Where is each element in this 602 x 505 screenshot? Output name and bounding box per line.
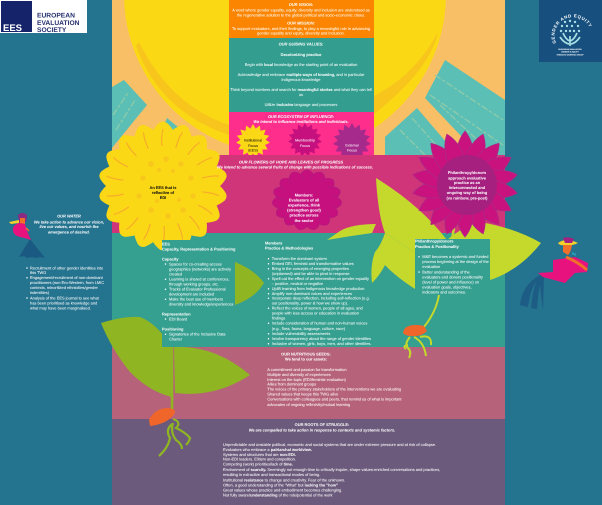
flower: philanthropy donors: interconnected and [449,185,486,190]
panel: roots of struggle: Institutional resistance to change and creativity. Fear of the unknown. [223,477,345,482]
panel: members practice and methodologies: Embed DEI, feminist and transformative values [272,261,354,266]
flower: EES reflective of EDI [97,121,229,251]
panel: philanthropy practice and positionality: process beginning at the design of the [422,259,490,264]
panel: members practice and methodologies: Include consideration of human and non-human voices [272,321,367,326]
panel: ecosystem of influence: OUR ECOSYSTEM OF INFLUENCE: [268,114,335,119]
panel: our water: live our values, and nourish the [39,224,99,229]
flower: members: practice across [290,213,319,218]
flower: external focus [333,123,371,162]
plant: green left leaves, stem, seed and roots [101,317,250,456]
logo: gender and equity working group: THEMATIC WORKING GROUP [557,53,584,56]
panel: our water: OUR WATER [57,213,81,218]
panel: roots of struggle: Not fully aware/understanding of the role/potential of the work [223,492,332,497]
panel: vision and mission: To support evaluators, and their findings, to play a meaningful role in advancing [232,26,370,31]
panel: EES capacity, representation and positioning: Signatories of the Inclusive Data [169,332,226,337]
panel: members practice and methodologies: Bring in the concepts of emerging properties [272,266,349,271]
panel: philanthropy practice and positionality: M&E becomes a systemic and funded [422,254,488,259]
panel: members practice and methodologies: findings [272,316,285,321]
flower: membership focus: Membership [295,139,315,143]
panel: members practice and methodologies: Practice & Methodologies [265,246,314,251]
panel: members practice and methodologies: Involve transparency about the range of gender identities [272,336,371,341]
panel: EES capacity, representation and positioning: EES [162,241,170,246]
panel: nutritious seeds: Allies from dominant groups [267,382,316,387]
panel: philanthropy practice and positionality: indicators and outcomes. [422,289,466,294]
panel: philanthropy practice and positionality: evaluation goals, objectives, [422,284,472,289]
panel: roots of struggle: We are compelled to take action in response to contexts and systemic factors. [249,427,395,432]
panel: EES capacity, representation and positioning: diversity and knowledge/experiences [169,302,233,307]
panel: members practice and methodologies: Amplify non-dominant voices and experiences [272,291,352,296]
panel: philanthropy practice and positionality: Practice & Positionality [415,244,460,249]
panel: EES capacity, representation and positioning: Make the best use of members [169,297,223,302]
panel: guiding values: Begin with local knowledge as the starting point of an evaluation [245,62,357,67]
panel: our water: contexts, minoritized ethnicities/gender [30,285,99,290]
flower: institutional focus: Institutional [244,138,262,142]
panel: roots of struggle: Systems and structures that are non-EDI. [223,452,296,457]
flower: institutional focus: (EES) [248,149,258,153]
sun rays [112,60,505,156]
panel: EES capacity, representation and positioning: Positioning [162,327,184,332]
panel: our water: Engagement/recruitment of non-dominant [30,275,104,280]
panel: vision and mission: OUR MISSION: [287,21,316,26]
flower: EES reflective of EDI: An EES that is [150,185,177,190]
panel: nutritious seeds: The voices of the primary stakeholders of the interventions we are evaluating [267,387,401,392]
panel: roots of struggle: Environment of scarcity. Seemingly not enough time to critically inquire, shape values-enriched conversations and practices, [223,467,440,472]
icon: woman watering left [9,213,45,258]
flower: institutional focus: Focus [248,144,258,148]
flower: institutional focus [236,124,270,158]
plant: yellow-green leaves [327,178,541,289]
panel: philanthropy practice and positionality: Philanthropy/donors [415,239,454,244]
panel: vision and mission: A word where gender equality, equity, diversity and inclusion are understood as [232,8,370,13]
panel: our water: emergence of desired. [48,229,90,234]
flower: membership focus [288,123,322,157]
panel: our water: We take action to advance our vision, [34,219,104,224]
flower: members: Members: [295,193,313,198]
panel: philanthropy practice and positionality: (level of power and influence) on [422,279,479,284]
panel: members practice and methodologies: people with less access or education in evaluation [272,311,359,316]
logo: European Evaluation Society [0,0,87,34]
panel: members practice and methodologies: Transform the dominant system [272,256,328,261]
flower: philanthropy donors: approach evaluative [448,175,487,180]
flower: members: the sector [295,218,314,223]
flower: philanthropy donors [411,131,519,237]
panel: guiding values: Acknowledge and embrace multiple ways of knowing, and in particular [238,72,365,77]
panel: members practice and methodologies: our positionality, power & how we show up). [272,301,348,306]
panel: EES capacity, representation and positioning: Capacity [162,256,179,261]
panel: guiding values: Decolonizing practice [281,52,322,57]
logo: gender and equity working group: GENDER AND EQUITY [551,14,592,44]
panel: EES capacity, representation and positioning: Tracks of Evaluator Professional [169,287,226,292]
plant: small green right leaf [235,262,264,305]
panel: nutritious seeds: Interest on the topic (EDI/feminist evaluation) [267,377,347,382]
panel: guiding values: OUR GUIDING VALUES: [279,41,324,46]
flower: philanthropy donors: ongoing way of being [447,190,488,195]
panel: nutritious seeds: A commitment and passion for transformation [267,367,347,372]
panel: our water: this TWG [30,270,46,275]
logo: European Evaluation Society: EUROPEAN [37,13,75,20]
panel: our water: Recruitment of other gender identities into [30,265,104,270]
flower: EES reflective of EDI: reflective of [152,190,175,195]
panel: our water [27,213,104,311]
panel: EES capacity, representation and positioning: development are included [169,292,214,297]
panel: vision and mission: OUR VISION: [289,2,314,7]
panel: vision and mission: gender equality and equity, diversity and inclusion. [257,31,345,36]
panel: roots of struggle: OUR ROOTS OF STRUGGLE: [295,422,349,427]
panel: nutritious seeds [112,347,505,420]
panel: EES capacity, representation and positioning: Capacity, Representation & Positioning [162,246,236,251]
panel: ecosystem of influence [229,112,374,162]
panel: roots of struggle: Competing (work) priorities/lack of time. [223,462,293,467]
flower: membership focus: Focus [300,144,310,148]
panel: guiding values: us [299,92,303,97]
plant: right stem, seed and roots [403,295,439,358]
logo: European Evaluation Society: EES [3,23,22,34]
panel: members practice and methodologies [265,241,372,346]
panel: roots of struggle: Great values whose practice and embodiment becomes challenging. [223,487,342,492]
panel: roots of struggle: Non-EDI leaders. Elitism and competition. [223,457,296,462]
panel: roots of struggle: resulting in extractive and transactional modes of being. [223,472,320,477]
icon: woman watering right [520,237,588,310]
flower: members: (strengthen good) [287,208,322,213]
panel: nutritious seeds: Shared values that keeps this TWG alive [267,392,339,397]
panel: ecosystem of influence: We intend to influence institutions and individuals. [253,119,349,124]
panel: members practice and methodologies: Reflect the voices of women, people of all ages, and [272,306,363,311]
panel: our water: has been prioritised as knowledge and [30,301,97,306]
panel: roots of struggle [112,419,505,505]
panel: EES capacity, representation and positioning: Learning is shared at conferences, [169,277,229,282]
panel: EES capacity, representation and positioning: Charter [169,337,183,342]
panel: our water: indentities) [30,290,50,295]
panel: EES capacity, representation and positioning: geographies (networks) are actively [169,266,231,271]
panel: flowers of hope and leaves of progress [112,155,505,234]
heading: flowers of hope and leaves of progress: OUR FLOWERS OF HOPE AND LEAVES OF PROGRESS [239,159,344,164]
panel: guiding values: Think beyond numbers and search for meaningful stories and what they can tell [230,87,372,92]
panel: capacity and practice background [112,233,505,347]
logo: gender and equity working group [539,0,602,62]
panel: members practice and methodologies: Spell out the effect of an intervention on gender equality [272,276,369,281]
panel: philanthropy practice and positionality: evaluators and donors positionality [422,274,483,279]
panel: philanthropy practice and positionality [415,239,490,295]
panel: nutritious seeds: We tend to our assets: [285,356,327,361]
flower: philanthropy donors: (vs rainbow, pre-post) [447,195,488,200]
flower: philanthropy donors: Philanthropy/donors [448,170,487,175]
panel: EES capacity, representation and positioning [162,240,236,347]
panel: EES capacity, representation and positioning: created [169,271,182,276]
panel: EES capacity, representation and positioning: EDI Board [169,316,187,321]
panel: members practice and methodologies: Incorporate deep reflection, including self-reflection (e.g. [272,296,370,301]
logo: European Evaluation Society: EVALUATION [37,20,80,27]
panel: roots of struggle: Unpredictable and unstable political, economic and social systems that are under extreme pressure and at risk of collapse. [223,442,436,447]
panel: members practice and methodologies: – positive, neutral or negative [272,281,324,286]
panel: nutritious seeds: advocates of ongoing reflexivity/mutual learning [267,402,350,407]
panel: members practice and methodologies: (e.g., flora, fauna, language, culture, race) [272,326,346,331]
panel: EES capacity, representation and positioning: through working groups, etc. [169,282,219,287]
panel: vision and mission: the regenerative solution to the global political and socio-economic crises. [237,13,365,18]
logo: European Evaluation Society: SOCIETY [37,27,67,34]
heading: flowers of hope and leaves of progress: We intend to advance several fruits of change with possible indications of success. [217,165,373,170]
panel: members practice and methodologies: (unplanned) and be able to pivot in response [272,271,350,276]
flower: philanthropy donors: practice as an [454,180,481,185]
panel: vision and mission [229,0,374,38]
flower: external focus: Focus [347,148,357,152]
panel: members practice and methodologies: Inclusive of women, girls, boys, men, and other identities. [272,341,372,346]
logo: gender and equity working group: GENDER & EQUITY [561,51,580,54]
logo: gender and equity working group: EUROPEAN EVALUATION [558,48,582,51]
panel: nutritious seeds: OUR NUTRITIOUS SEEDS: [281,351,331,356]
panel: our water: practitioners (non Ero-Western, from LMIC [30,280,104,285]
flower: members: experience, think [288,202,321,207]
flower: members: Evaluators of all [289,197,319,202]
flower: EES reflective of EDI: EDI [160,195,166,200]
panel: EES capacity, representation and positioning: Spaces for co-creating access [169,261,222,266]
flower: members [271,170,343,231]
panel: guiding values: indigenous knowledge [282,77,321,82]
panel: our water: Analysis of the EES journal to see what [30,295,100,300]
panel: members practice and methodologies: Include vulnerability assessments [272,331,330,336]
panel: EES capacity, representation and positioning: Representation [162,311,191,316]
panel: guiding values [229,38,374,112]
heading: flowers of hope and leaves of progress [217,159,373,170]
panel: roots of struggle: Often, a good understanding of the "What" but lacking the "how" [223,482,338,487]
panel: nutritious seeds: Multiple and diversity of experiences [267,372,331,377]
panel: roots of struggle: Evaluators who embrace a patriarchal worldview. [223,447,312,452]
flower: external focus: External [345,143,359,147]
panel: members practice and methodologies: Uplift learning from Indigenous knowledge production [272,286,365,291]
panel: our water: what may have been marginalised. [30,306,91,311]
panel: guiding values: Utilize inclusive language and processes [265,102,337,107]
panel: sky [112,0,505,156]
panel: nutritious seeds: Conversations with colleagues and peers, that remind us of what is important [267,397,402,402]
panel: philanthropy practice and positionality: evaluation [422,264,440,269]
panel: philanthropy practice and positionality: Better understanding of the [422,269,471,274]
panel: members practice and methodologies: Members [265,241,283,246]
